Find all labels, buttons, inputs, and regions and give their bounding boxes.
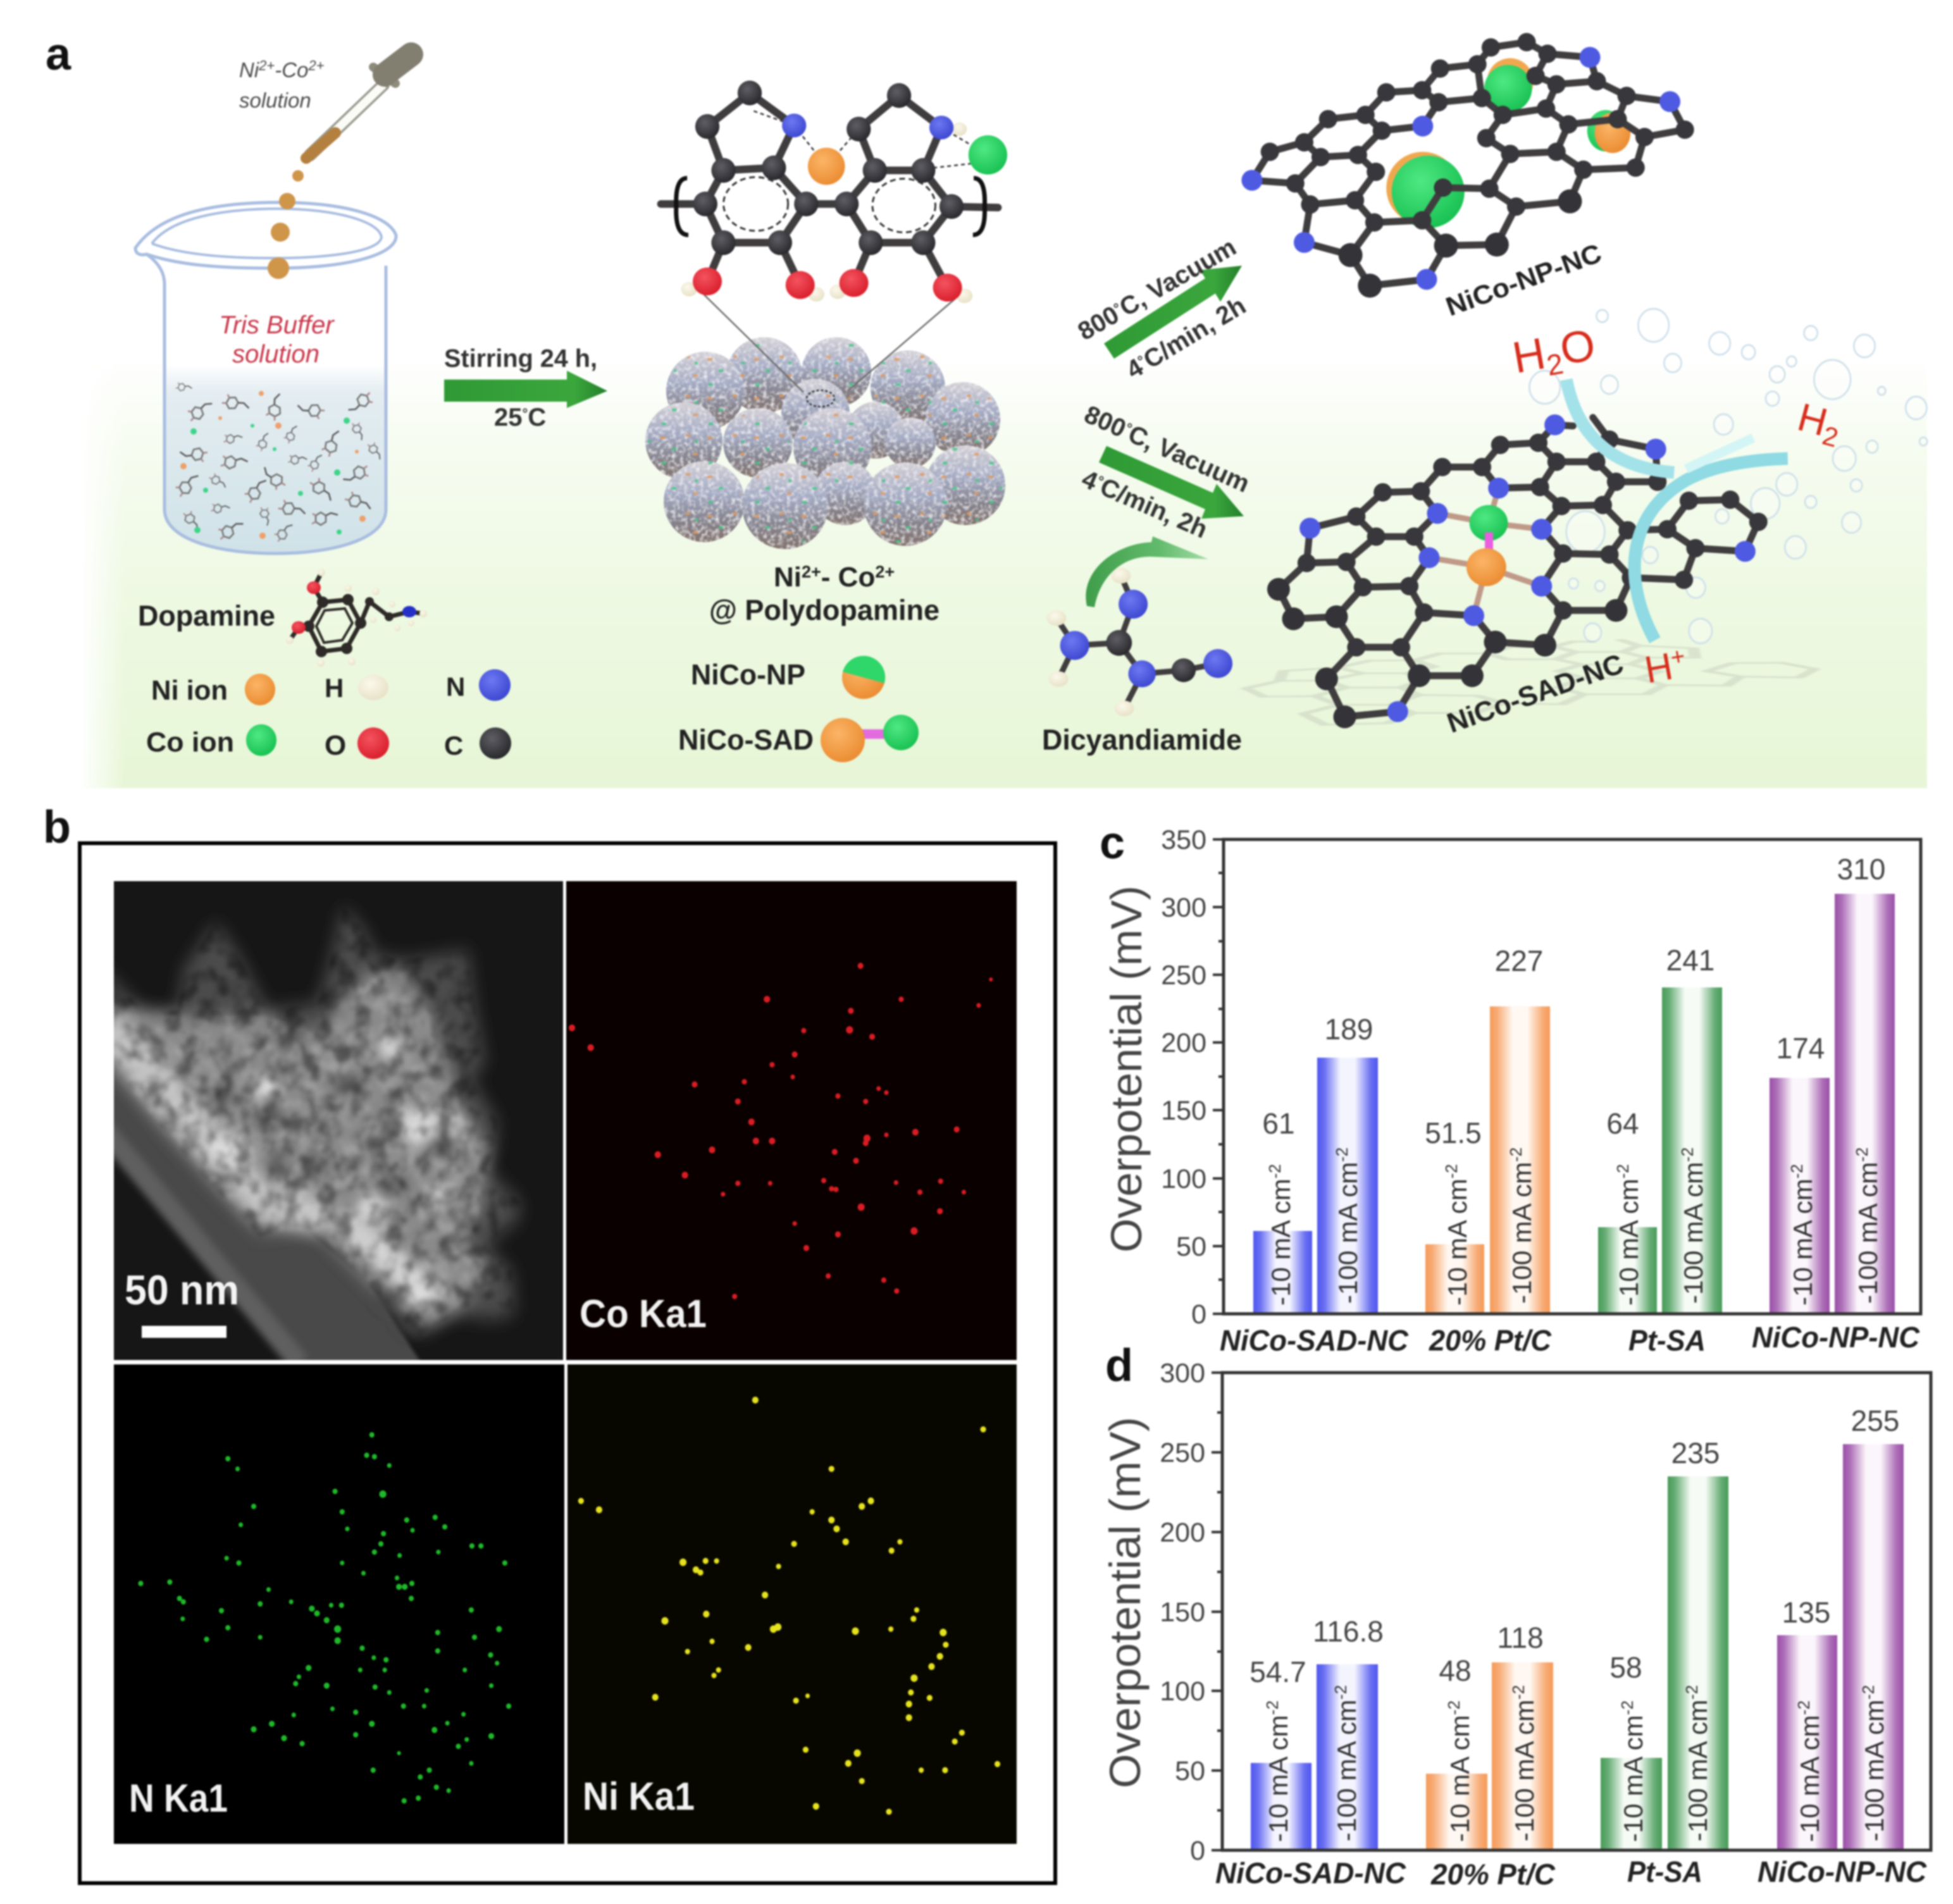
value labels: 135 [1782, 1596, 1830, 1629]
label: Ni Ka1: Ni Ka1 [583, 1775, 695, 1819]
panel label c: c [1100, 818, 1125, 869]
arrow: 800C vacuum downward [1099, 446, 1244, 519]
label: H2O: H [1509, 328, 1549, 383]
label: Ni-Co solution: 2+ [307, 58, 325, 73]
panel frame [80, 843, 1055, 1883]
N map [114, 1364, 564, 1844]
metal-nitrogen bonds [1429, 488, 1542, 615]
NiCo-SAD-NC graphene sheet [1279, 417, 1758, 717]
y axis title: Overpotential (mV) [1102, 886, 1151, 1252]
legend: NiCo-NP: NiCo-NP [691, 658, 805, 691]
large carbon atoms [1351, 201, 1570, 286]
current density labels: -10 mA cm [1788, 1178, 1818, 1306]
label: upper heating conditions [1073, 233, 1251, 385]
large carbon atoms [1279, 590, 1616, 717]
scale bar label: 50 nm [125, 1266, 239, 1313]
Ni-Co bond [1485, 533, 1493, 552]
panel label d: d [1105, 1340, 1133, 1391]
label: upper heating conditions: ° [1135, 352, 1148, 369]
value labels: 235 [1671, 1437, 1720, 1469]
nickel atom [1466, 548, 1506, 586]
nitrogen atoms [1310, 425, 1745, 712]
current density labels: -10 mA cm [1618, 1715, 1648, 1842]
value labels: 118 [1497, 1621, 1544, 1654]
graphene shadow [1246, 640, 1815, 725]
value labels: 54.7 [1249, 1655, 1306, 1688]
current density labels: -2 [1265, 1164, 1284, 1178]
legend: N: N [446, 672, 465, 702]
current density labels: -2 [1678, 1147, 1697, 1162]
label: stirring conditions: C [528, 404, 546, 431]
panel d: bar chart overpotential [1101, 1340, 1931, 1891]
scale bar [142, 1326, 226, 1338]
current density labels: -100 mA cm [1683, 1700, 1713, 1841]
HAADF image [90, 879, 563, 1364]
label: H+: H [1642, 645, 1676, 691]
label: stirring conditions: 25 [494, 404, 523, 431]
current density labels: -2 [1506, 1147, 1525, 1162]
legend: NiCo-SAD [678, 715, 919, 762]
current density labels: -10 mA cm [1442, 1178, 1472, 1306]
value labels: 61 [1262, 1107, 1295, 1140]
label: Ni-Co at polydopamine: Ni [774, 562, 802, 593]
legend: atoms [146, 669, 511, 761]
label: H2O: O [1556, 319, 1599, 374]
value labels: 58 [1609, 1651, 1642, 1684]
value labels: 189 [1325, 1013, 1373, 1046]
beaker [135, 202, 396, 553]
label: upper heating conditions: 800 [1073, 300, 1124, 346]
y tick labels: 200 [1160, 1518, 1205, 1548]
legend: C: C [444, 731, 463, 760]
current density labels [1263, 1685, 1889, 1842]
current density labels: -100 mA cm [1333, 1162, 1363, 1304]
y tick labels: 350 [1161, 825, 1206, 855]
axes frame and ticks [1213, 839, 1921, 1314]
current density labels: -100 mA cm [1507, 1162, 1537, 1304]
label: Ni-Co solution: Ni [239, 58, 259, 82]
category labels: NiCo-NP-NC [1758, 1855, 1927, 1888]
label: Tris Buffer solution: solution [232, 340, 319, 368]
category labels: NiCo-SAD-NC [1220, 1324, 1409, 1357]
legend: NiCo-SAD: NiCo-SAD [678, 724, 814, 756]
current density labels: -2 [1509, 1685, 1528, 1700]
current density labels: -2 [1682, 1685, 1701, 1700]
category labels [1215, 1855, 1927, 1891]
ions in beaker [180, 391, 366, 539]
icon: dopamine molecule [286, 569, 427, 667]
current density labels: -100 mA cm [1332, 1700, 1361, 1841]
label: N Ka1: N Ka1 [129, 1777, 228, 1821]
nanoparticles [1386, 58, 1630, 228]
carbon bonds [1279, 417, 1758, 717]
y tick labels: 200 [1161, 1028, 1206, 1058]
current density labels: -100 mA cm [1859, 1700, 1889, 1841]
Co map [566, 881, 1017, 1360]
legend: NiCo-NP [691, 656, 885, 699]
panel b: elemental mapping [43, 802, 1055, 1883]
panel label b: b [43, 802, 71, 853]
y tick labels: 300 [1161, 893, 1206, 923]
y tick labels [1161, 825, 1206, 1330]
y tick labels: 150 [1160, 1597, 1205, 1628]
value labels: 48 [1439, 1654, 1472, 1687]
NiCo-NP-NC graphene sheet [1252, 42, 1685, 286]
label: dicyandiamide: Dicyandiamide [1042, 724, 1242, 756]
y tick labels: 150 [1161, 1096, 1206, 1126]
current density labels: -10 mA cm [1266, 1178, 1296, 1306]
label: NiCo-NP-NC: NiCo-NP-NC [1442, 238, 1606, 321]
y tick labels: 0 [1191, 1299, 1206, 1330]
panel label a: a [46, 29, 71, 80]
value labels [1262, 853, 1885, 1149]
current density labels: -2 [1859, 1685, 1878, 1700]
label: dopamine: Dopamine [138, 600, 275, 632]
panel c: bar chart overpotential [1100, 818, 1921, 1357]
y tick labels: 250 [1160, 1438, 1205, 1468]
y tick labels: 50 [1176, 1232, 1206, 1262]
legend: O: O [325, 730, 346, 761]
cobalt atom [1470, 505, 1508, 541]
value labels: 64 [1606, 1107, 1639, 1140]
legend: C [444, 727, 511, 760]
label: NiCo-SAD-NC: NiCo-SAD-NC [1443, 648, 1628, 739]
label: Ni-Co at polydopamine: 2+ [875, 562, 895, 581]
legend: O [325, 727, 389, 761]
current density labels: -10 mA cm [1263, 1715, 1293, 1842]
solution drops [268, 170, 304, 279]
polymer molecule structure [661, 80, 1007, 303]
y axis title: Overpotential (mV) [1101, 1417, 1150, 1788]
label: Ni-Co solution [239, 58, 325, 112]
label: H+: + [1668, 643, 1687, 672]
Ni map [567, 1364, 1017, 1844]
icon: dicyandiamide molecule [1047, 568, 1232, 716]
category labels [1220, 1321, 1920, 1357]
value labels: 255 [1851, 1404, 1899, 1437]
y tick labels: 100 [1161, 1164, 1206, 1194]
label: lower heating conditions: 800 [1080, 400, 1130, 443]
current density labels: -2 [1794, 1700, 1813, 1715]
label: Tris Buffer solution: Tris Buffer [219, 311, 335, 339]
current density labels: -10 mA cm [1445, 1715, 1475, 1842]
current density labels: -2 [1331, 1685, 1350, 1700]
legend: Ni ion: Ni ion [151, 675, 228, 706]
value labels: 174 [1776, 1032, 1825, 1065]
label: upper heating conditions: C/min, 2h [1139, 292, 1251, 374]
dopamine molecules in beaker [175, 381, 381, 543]
arrow: curved green [1086, 536, 1208, 607]
carbon atoms [1306, 440, 1758, 647]
current density labels: -2 [1444, 1700, 1463, 1715]
value labels: 241 [1666, 944, 1714, 977]
current density labels: -100 mA cm [1853, 1162, 1883, 1304]
label: H2: H [1793, 395, 1832, 445]
current density labels: -2 [1787, 1164, 1806, 1178]
arrow: stirring [444, 371, 607, 408]
label: upper heating conditions: ° [1111, 299, 1124, 316]
arrow: 800C vacuum upward [1104, 266, 1242, 359]
value labels [1249, 1404, 1899, 1688]
label: stirring conditions: Stirring 24 h, [444, 345, 597, 373]
current density labels: -10 mA cm [1614, 1178, 1644, 1306]
polydopamine spheres [645, 337, 1005, 549]
legend: Co ion [146, 724, 276, 758]
legend: H [325, 673, 388, 703]
current density labels: -2 [1442, 1164, 1461, 1178]
label: lower heating conditions: ° [1122, 419, 1134, 436]
label: lower heating conditions: ° [1094, 473, 1107, 490]
value labels: 51.5 [1425, 1116, 1482, 1149]
category labels: 20% Pt/C [1430, 1858, 1556, 1891]
category labels: Pt-SA [1628, 1324, 1706, 1357]
label: lower heating conditions [1077, 400, 1253, 544]
current density labels: -2 [1613, 1164, 1632, 1178]
label: Ni-Co at polydopamine: 2+ [802, 562, 821, 581]
label: Co Ka1: Co Ka1 [580, 1292, 707, 1336]
y tick labels: 50 [1175, 1756, 1205, 1786]
label: Ni-Co at polydopamine: - Co [821, 562, 875, 593]
current density labels [1265, 1147, 1883, 1306]
legend: H: H [325, 673, 344, 703]
value labels: 227 [1495, 944, 1543, 977]
label: upper heating conditions: C, Vacuum [1115, 233, 1241, 322]
category labels: NiCo-SAD-NC [1215, 1857, 1406, 1889]
carbon bonds [1252, 42, 1685, 286]
reaction arrows [1566, 380, 1788, 640]
y tick labels [1160, 1358, 1205, 1866]
panel a green gradient background [81, 354, 1927, 788]
label: upper heating conditions: 4 [1122, 354, 1148, 385]
current density labels: -2 [1332, 1147, 1351, 1162]
bubbles [1529, 309, 1927, 643]
label: lower heating conditions: C, Vacuum [1124, 420, 1253, 498]
value labels: 116.8 [1313, 1615, 1384, 1648]
label: Ni-Co at polydopamine [709, 562, 939, 626]
label: H2: 2 [1820, 420, 1842, 453]
current density labels: -100 mA cm [1678, 1162, 1708, 1304]
current density labels: -100 mA cm [1510, 1700, 1539, 1841]
bars [1251, 1444, 1904, 1850]
legend: Co ion: Co ion [146, 727, 234, 758]
carbon atoms [1270, 42, 1685, 223]
y tick labels: 0 [1190, 1836, 1205, 1866]
y tick labels: 100 [1160, 1676, 1205, 1707]
legend: N [446, 669, 511, 702]
icon: dropper [306, 54, 411, 158]
category labels: 20% Pt/C [1429, 1324, 1552, 1357]
y tick labels: 250 [1161, 960, 1206, 991]
label: Ni-Co at polydopamine: @ Polydopamine [709, 594, 939, 626]
label: Tris Buffer solution [219, 311, 335, 368]
label: lower heating conditions: C/min, 2h [1096, 473, 1212, 544]
panel a: synthesis scheme [46, 29, 1927, 788]
current density labels: -2 [1618, 1700, 1637, 1715]
legend: Ni ion [151, 674, 275, 706]
current density labels: -2 [1852, 1147, 1871, 1162]
bars [1253, 894, 1895, 1314]
zoom lines to polymer [704, 294, 955, 407]
value labels: 310 [1837, 853, 1885, 886]
current density labels: -2 [1263, 1700, 1282, 1715]
label: H2O: 2 [1544, 347, 1566, 382]
nitrogen atoms [1252, 58, 1670, 280]
axes frame and ticks [1212, 1373, 1931, 1850]
current density labels: -10 mA cm [1795, 1715, 1825, 1842]
label: stirring conditions [444, 345, 597, 431]
label: Ni-Co solution: 2+ [258, 58, 275, 73]
label: Ni-Co solution: -Co [275, 58, 308, 82]
label: Ni-Co solution: solution [239, 89, 311, 112]
category labels: Pt-SA [1627, 1855, 1702, 1888]
label: stirring conditions: ° [523, 405, 528, 421]
category labels: NiCo-NP-NC [1752, 1321, 1920, 1354]
label: lower heating conditions: 4 [1077, 465, 1101, 496]
y tick labels: 300 [1160, 1358, 1205, 1388]
